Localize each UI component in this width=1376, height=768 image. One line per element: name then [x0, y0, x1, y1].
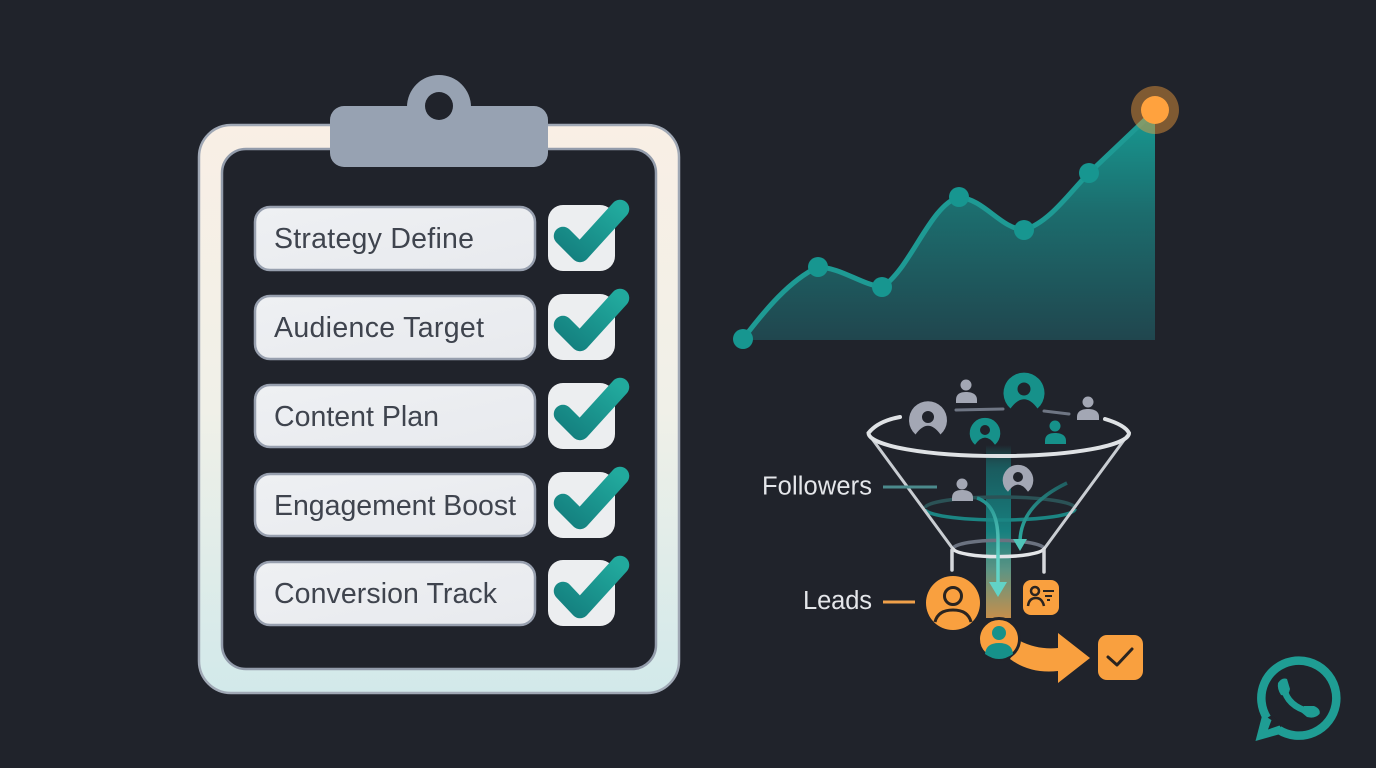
- icon: WhatsApp logo: [1256, 661, 1336, 741]
- conversion check badge: [1098, 635, 1143, 680]
- panel: clipboard: [199, 75, 679, 693]
- person: teal: [1045, 420, 1066, 444]
- label: Leads: [803, 587, 915, 615]
- chart data points: [733, 163, 1099, 349]
- funnel diagram: [762, 373, 1143, 683]
- funnel body outline: [868, 409, 1129, 572]
- funnel central flow band: [986, 445, 1011, 618]
- checkbox: Strategy Define: [548, 205, 620, 271]
- lead profile card icon: [1023, 580, 1059, 615]
- checklist item: Engagement Boost: Engagement Boost: [274, 490, 516, 522]
- label: Leads: Leads: [803, 587, 872, 615]
- person: grey inside funnel: [952, 478, 973, 501]
- checklist item: Content Plan: Content Plan: [274, 401, 439, 433]
- converted lead avatar: [978, 618, 1020, 660]
- checklist item: Audience Target: [255, 296, 535, 359]
- checkbox: Content Plan: [548, 383, 620, 449]
- checklist item: Conversion Track: [255, 562, 535, 625]
- avatar: teal large: [1003, 373, 1044, 408]
- chart peak marker: [1131, 86, 1179, 134]
- avatar: teal medium: [970, 418, 1000, 445]
- clipboard inner board: [222, 149, 656, 669]
- funnel middle ring: [925, 497, 1075, 520]
- clipboard frame: [199, 125, 679, 693]
- avatar: grey large: [909, 401, 947, 434]
- arrow: conversion: [1010, 633, 1090, 683]
- clipboard clip: [330, 75, 548, 167]
- checklist item: Strategy Define: [255, 207, 535, 270]
- checkbox: Engagement Boost: [548, 472, 620, 538]
- arrow: right flow: [1013, 483, 1067, 551]
- chart line: [743, 118, 1147, 339]
- checklist item: Engagement Boost: [255, 474, 535, 536]
- checklist item: Content Plan: [255, 385, 535, 447]
- checkbox: Audience Target: [548, 294, 620, 360]
- lead avatar: [926, 576, 980, 630]
- checklist item: Strategy Define: Strategy Define: [274, 223, 474, 255]
- person: grey right: [1077, 396, 1099, 420]
- checklist item: Audience Target: Audience Target: [274, 312, 484, 344]
- chart area fill: [743, 110, 1155, 340]
- label: Followers: Followers: [762, 472, 872, 500]
- avatar: grey inside funnel: [1003, 465, 1033, 492]
- arrow: left flow: [977, 498, 1007, 597]
- checkbox: Conversion Track: [548, 560, 620, 626]
- chart: growth area line: [733, 86, 1179, 349]
- person: grey top: [956, 380, 977, 403]
- checklist item: Conversion Track: Conversion Track: [274, 578, 498, 610]
